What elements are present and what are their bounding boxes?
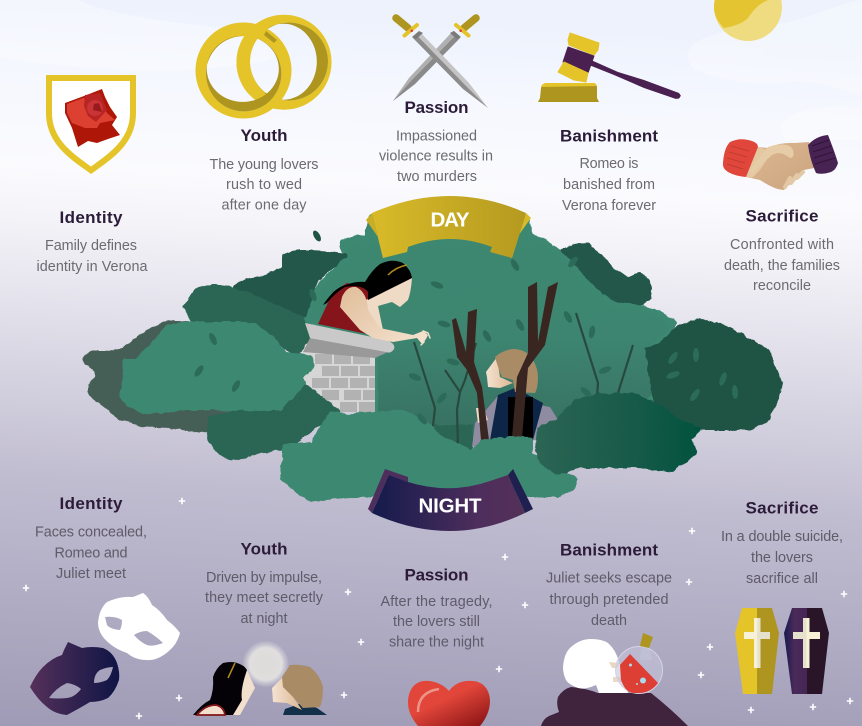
text: passion day: violence results in [379,148,493,164]
text: youth night: they meet secretly [205,590,324,606]
text: banishment day: Verona forever [562,198,656,214]
icon: heart [408,681,490,726]
figure: Romeo [472,349,560,447]
text: youth day [210,157,318,214]
heading: Passion: Passion [404,98,468,117]
banner: DAY [366,196,531,258]
text: sacrifice night [721,529,843,587]
foliage: foreground and right bushes [283,321,780,499]
leaves [193,229,739,426]
balcony wall [303,352,375,412]
banner: NIGHT: NIGHT [418,495,482,518]
text: banishment night: Juliet seeks escape [546,571,672,587]
foliage: left main bush [123,325,312,412]
icon: sun [714,0,782,41]
foliage: lower left bush [210,388,337,457]
heading: Sacrifice: Sacrifice [746,499,818,518]
heading: Banishment: Banishment [560,541,658,560]
panel: night youth [193,540,327,715]
text: banishment day [562,156,656,214]
text: sacrifice night: the lovers [751,550,813,566]
text: sacrifice night: In a double suicide, [721,529,843,545]
foliage: back bushes [86,218,674,437]
text: sacrifice day: reconcile [753,278,811,294]
text: sacrifice day [724,237,840,294]
heading: Youth: Youth [240,126,288,145]
text: youth night: Driven by impulse, [206,570,322,586]
text: youth night [205,570,324,627]
text: youth day: The young lovers [210,157,318,173]
panel: day banishment [538,33,681,214]
text: identity night [35,525,147,582]
text: banishment night [546,571,672,629]
branches [414,313,633,448]
text: passion day: two murders [397,169,477,185]
text: passion day [379,128,493,185]
text: passion night [380,594,492,651]
panel: night identity [30,494,180,715]
text: youth day: after one day [222,198,307,214]
heading: Identity: Identity [60,494,123,513]
panel: night passion [380,566,492,726]
text: sacrifice day: Confronted with [730,237,834,253]
text: identity night: Juliet meet [56,566,126,582]
figure: Juliet [318,261,430,345]
text: youth night: at night [240,611,288,627]
icon: shield with rose [46,75,136,174]
text: passion night: the lovers still [393,614,480,630]
text: banishment night: through pretended [550,592,668,608]
text: banishment day: Romeo is [580,156,638,172]
icon: gavel [538,33,681,102]
panel: day passion [379,18,493,185]
text: sacrifice day: death, the families [724,258,840,274]
heading: Youth: Youth [240,540,288,559]
text: banishment day: banished from [563,177,655,193]
text: identity day [36,238,148,275]
text: banishment night: death [591,613,627,629]
icon: handshake [723,135,838,190]
panel: day identity [36,75,148,275]
icon: masks [30,593,180,715]
text: identity night: Romeo and [54,546,128,562]
trees [452,282,558,440]
heading: Identity: Identity [60,208,123,227]
icon: purple coffin [784,608,829,694]
heading: Sacrifice: Sacrifice [746,207,818,226]
balcony ledge [303,323,394,358]
text: identity day: Family defines [45,238,137,254]
scene: balcony and garden [86,218,780,499]
icon: crossed swords [393,18,488,108]
panel: day sacrifice [723,135,840,294]
clouds [0,0,862,140]
text: passion day: Impassioned [396,128,477,144]
icon: wedding rings [196,15,332,119]
text: sacrifice night: sacrifice all [746,571,818,587]
foliage: shade patch [435,425,473,452]
banner: NIGHT [368,469,533,531]
stars [23,498,853,719]
panel: day youth [196,15,332,214]
panel: night banishment [541,541,688,726]
panel: night sacrifice [721,499,843,694]
icon: skull and potion [541,633,688,726]
heading: Passion: Passion [404,566,468,585]
text: passion night: share the night [389,635,484,651]
text: identity day: identity in Verona [36,259,148,275]
text: identity night: Faces concealed, [35,525,147,541]
text: passion night: After the tragedy, [380,594,492,610]
text: youth day: rush to wed [226,177,302,193]
heading: Banishment: Banishment [560,127,658,146]
banner: DAY: DAY [430,209,470,232]
icon: moon and lovers [193,641,327,715]
icon: gold coffin [735,608,779,694]
